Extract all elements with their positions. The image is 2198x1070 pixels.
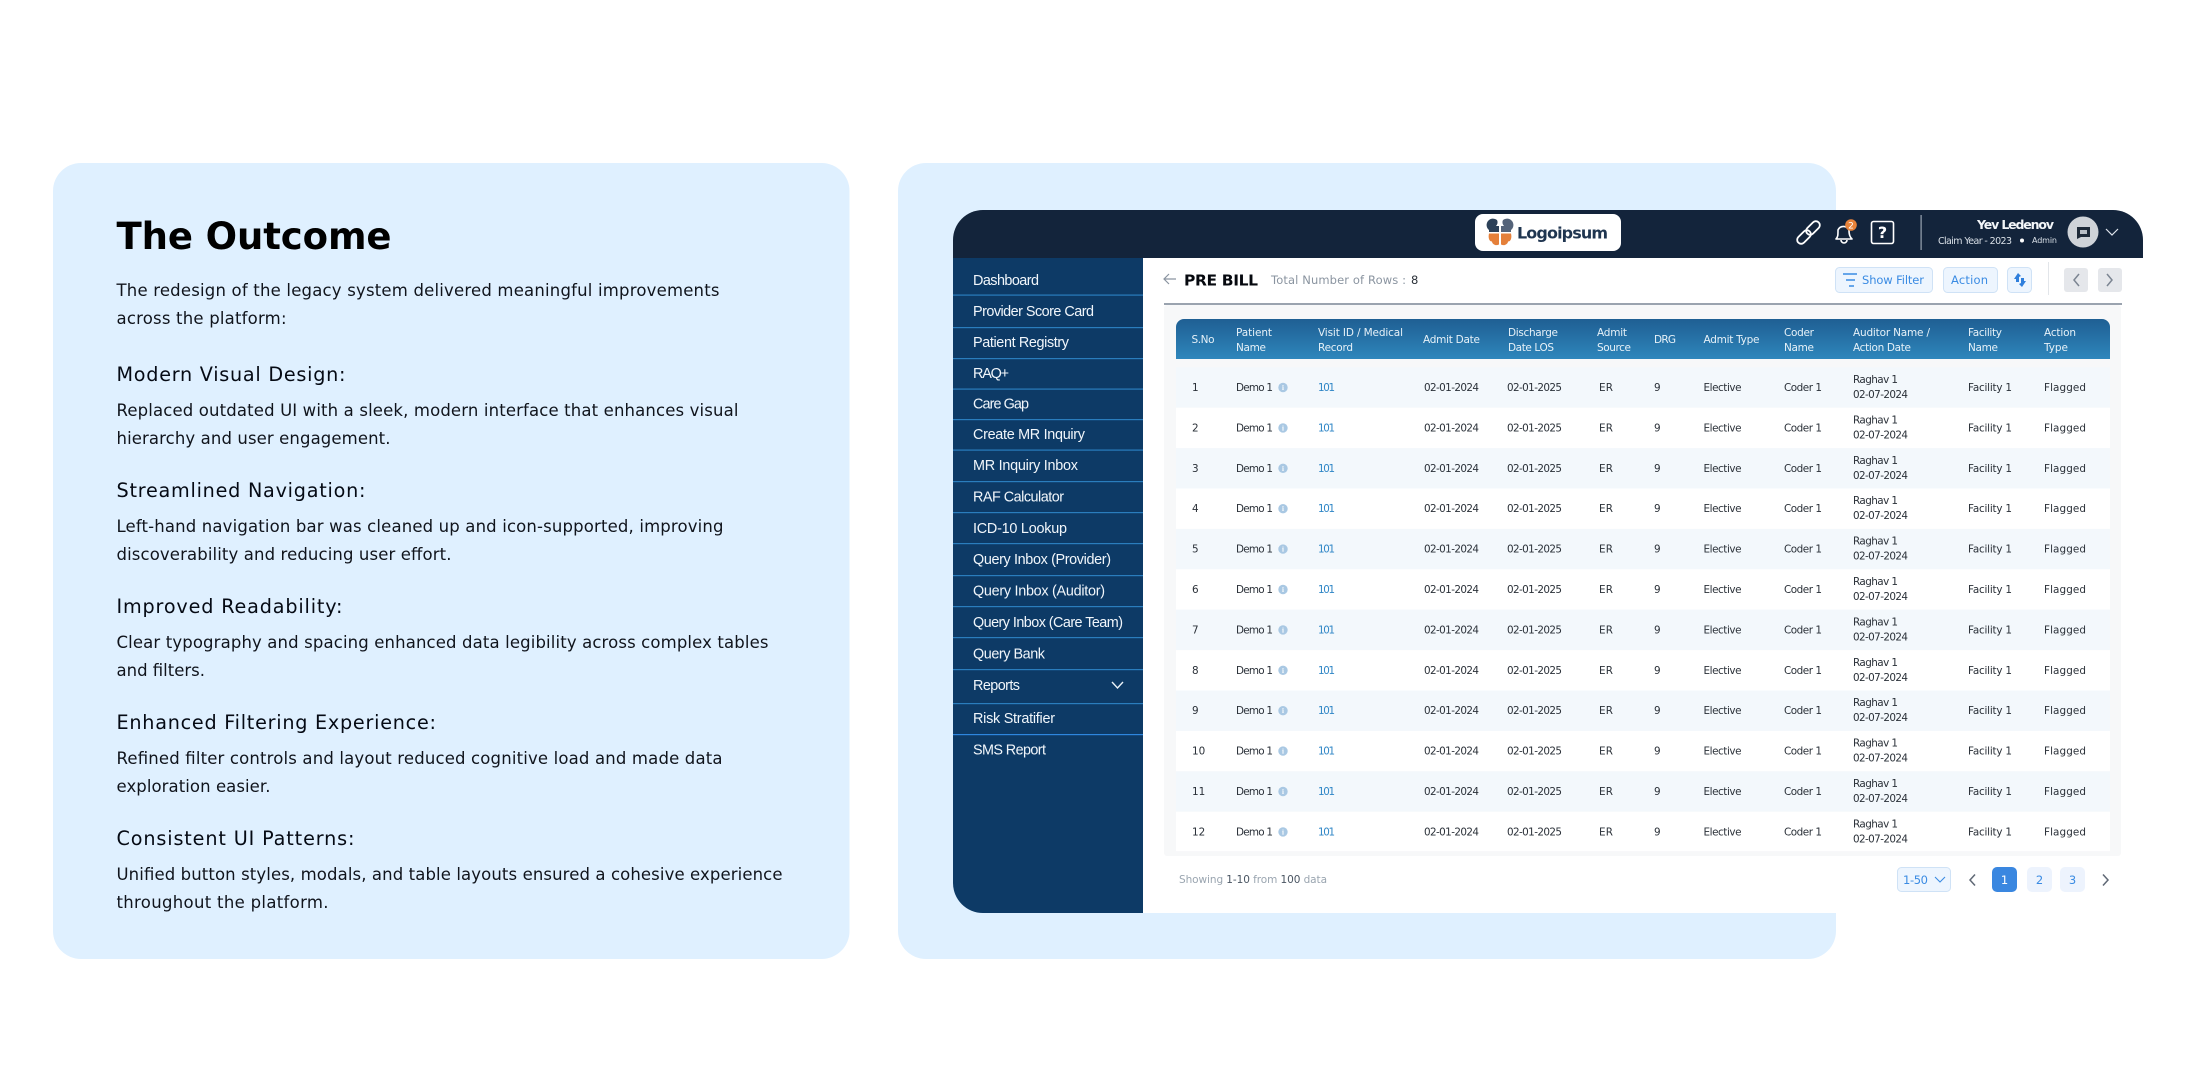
row 2: Elective (1704, 422, 1742, 434)
row 1: Coder 1 (1784, 382, 1822, 394)
title: The Outcome (116, 215, 392, 258)
icon: help (1872, 222, 1894, 244)
row 1: i (1282, 384, 1284, 392)
row 4: 9 (1654, 503, 1661, 515)
row 10: Demo 1 (1236, 746, 1273, 758)
row 7: Demo 1 (1236, 624, 1273, 636)
table header: Visit ID / Medical (1318, 327, 1403, 339)
row 5: Raghav 1 (1853, 536, 1898, 548)
row 12: Flagged (2044, 826, 2086, 838)
row 10: 9 (1654, 746, 1661, 758)
table header: Admit Date (1423, 334, 1480, 346)
row 3: 02-01-2024 (1424, 463, 1479, 475)
row 11: i (1282, 788, 1284, 796)
row 5: i (1282, 546, 1284, 554)
row 8: 02-01-2025 (1507, 665, 1562, 677)
row 9: i (1282, 707, 1284, 715)
row 8: 02-01-2024 (1424, 665, 1479, 677)
row 7: Facility 1 (1968, 624, 2012, 636)
row 3: Demo 1 (1236, 463, 1273, 475)
row 1: Flagged (2044, 382, 2086, 394)
row 4: Flagged (2044, 503, 2086, 515)
table header: Auditor Name / (1853, 327, 1930, 339)
row 9: Flagged (2044, 705, 2086, 717)
row 8: 02-07-2024 (1853, 672, 1908, 684)
row 11: 101 (1318, 786, 1335, 798)
row 11: 9 (1654, 786, 1661, 798)
action button (1944, 268, 1998, 292)
row 5: Coder 1 (1784, 544, 1822, 556)
row 2: i (1282, 424, 1284, 432)
row 1: 101 (1318, 382, 1335, 394)
sidebar navigation: Provider Score Card (973, 304, 1094, 320)
row 1: 02-01-2025 (1507, 382, 1562, 394)
row 4: Demo 1 (1236, 503, 1273, 515)
row 12: 101 (1318, 826, 1335, 838)
row 2: Flagged (2044, 422, 2086, 434)
row 1: Facility 1 (1968, 382, 2012, 394)
row 3 (1176, 448, 2110, 488)
row 4: Elective (1704, 503, 1742, 515)
row 7 (1176, 610, 2110, 650)
row 3: 02-07-2024 (1853, 470, 1908, 482)
sidebar navigation: Care Gap (973, 396, 1029, 412)
row 12: Demo 1 (1236, 826, 1273, 838)
row 6: Demo 1 (1236, 584, 1273, 596)
row 12: 9 (1654, 826, 1661, 838)
row 2: Coder 1 (1784, 422, 1822, 434)
row 4: 101 (1318, 503, 1335, 515)
row 1: ER (1599, 382, 1613, 394)
user info: Yev Ledenov (1976, 217, 2054, 232)
row 12: 12 (1192, 826, 1205, 838)
data table (1176, 319, 2110, 851)
table header: S.No (1192, 334, 1214, 346)
icon: back arrow (1164, 274, 1176, 284)
row 11: Coder 1 (1784, 786, 1822, 798)
row 8: ER (1599, 665, 1613, 677)
section: consistent ui patterns (116, 827, 782, 912)
row 4: 4 (1192, 503, 1199, 515)
row 2: 02-01-2024 (1424, 422, 1479, 434)
row 6: 02-01-2024 (1424, 584, 1479, 596)
row 12: ER (1599, 826, 1613, 838)
row 4 (1176, 488, 2110, 529)
row 9: Raghav 1 (1853, 697, 1898, 709)
prev next buttons (2064, 268, 2122, 292)
row 2: 9 (1654, 422, 1661, 434)
table header: Type (2043, 342, 2068, 354)
section: streamlined navigation: discoverability and reducing user effort. (116, 545, 452, 564)
pagination: 1 (2001, 873, 2008, 887)
row 5: 02-01-2025 (1507, 544, 1562, 556)
row 8: Coder 1 (1784, 665, 1822, 677)
row 12: Raghav 1 (1853, 818, 1898, 830)
page title bar: 8 (1411, 273, 1418, 287)
row 5: 101 (1318, 544, 1335, 556)
row 7: i (1282, 626, 1284, 634)
row 3: 02-01-2025 (1507, 463, 1562, 475)
table footer summary: Showing 1-10 from 100 data (1179, 874, 1327, 886)
row 9: Elective (1704, 705, 1742, 717)
sidebar navigation: ICD-10 Lookup (973, 521, 1067, 537)
section: consistent ui patterns: Consistent UI Patterns: (116, 827, 354, 850)
table container (1164, 305, 2121, 856)
row 8: 101 (1318, 665, 1335, 677)
row 10: 10 (1192, 746, 1205, 758)
row 3: 9 (1654, 463, 1661, 475)
row 11: 11 (1192, 786, 1205, 798)
section: streamlined navigation (116, 479, 724, 564)
pagination: 2 (2036, 873, 2043, 887)
section: consistent ui patterns: Unified button styles, modals, and table layouts ensured a cohesive experience (116, 865, 782, 884)
section: enhanced filtering: Enhanced Filtering Experience: (116, 711, 436, 734)
row 7: 02-01-2024 (1424, 624, 1479, 636)
row 10: 02-07-2024 (1853, 753, 1908, 765)
panel: screenshot backdrop (898, 163, 1836, 959)
row 10: ER (1599, 746, 1613, 758)
row 6: 6 (1192, 584, 1199, 596)
row 4: Coder 1 (1784, 503, 1822, 515)
row 11: 02-01-2025 (1507, 786, 1562, 798)
icon: bell with badge: 2 (1848, 222, 1854, 232)
section: modern visual design: hierarchy and user engagement. (116, 429, 390, 448)
row 2: 02-07-2024 (1853, 429, 1908, 441)
row 11: Demo 1 (1236, 786, 1273, 798)
row 3: 3 (1192, 463, 1199, 475)
sidebar navigation (953, 258, 1143, 913)
row 6: Elective (1704, 584, 1742, 596)
row 8: Demo 1 (1236, 665, 1273, 677)
row 7: ER (1599, 624, 1613, 636)
row 9: 9 (1192, 705, 1199, 717)
row 7: Elective (1704, 624, 1742, 636)
row 10 (1176, 731, 2110, 771)
row 9: 9 (1654, 705, 1661, 717)
row 2 (1176, 408, 2110, 448)
row 6: ER (1599, 584, 1613, 596)
row 5: Elective (1704, 544, 1742, 556)
row 2: ER (1599, 422, 1613, 434)
table header: Name (1236, 342, 1266, 354)
row 3: i (1282, 465, 1284, 473)
row 10: Elective (1704, 746, 1742, 758)
show filter button: Show Filter (1862, 273, 1924, 287)
sidebar navigation: Risk Stratifier (973, 711, 1055, 727)
row 6: Coder 1 (1784, 584, 1822, 596)
row 9: ER (1599, 705, 1613, 717)
row 11: Elective (1704, 786, 1742, 798)
row 6: i (1282, 586, 1284, 594)
row 3: Raghav 1 (1853, 455, 1898, 467)
row 5 (1176, 529, 2110, 569)
row 5: 02-07-2024 (1853, 551, 1908, 563)
table header: Patient (1236, 327, 1272, 339)
row 2: Demo 1 (1236, 422, 1273, 434)
row 1: 1 (1192, 382, 1199, 394)
section: modern visual design: Modern Visual Design: (116, 363, 346, 386)
row 4: 02-01-2024 (1424, 503, 1479, 515)
row 11: Raghav 1 (1853, 778, 1898, 790)
row 6 (1176, 569, 2110, 610)
sidebar navigation: RAQ+ (973, 366, 1009, 382)
intro text: across the platform: (116, 309, 286, 328)
row 11: Flagged (2044, 786, 2086, 798)
row 9: 02-01-2025 (1507, 705, 1562, 717)
sync button (2008, 268, 2032, 292)
table header: Facility (1968, 327, 2002, 339)
row 6: Facility 1 (1968, 584, 2012, 596)
row 8: 9 (1654, 665, 1661, 677)
row 7: 7 (1192, 624, 1199, 636)
row 1: Raghav 1 (1853, 374, 1898, 386)
page title bar: PRE BILL (1184, 272, 1258, 290)
row 2: Facility 1 (1968, 422, 2012, 434)
row 8: i (1282, 667, 1284, 675)
row 12: 02-01-2024 (1424, 826, 1479, 838)
sidebar navigation: Dashboard (973, 273, 1039, 289)
row 8: Raghav 1 (1853, 657, 1898, 669)
row 8: Elective (1704, 665, 1742, 677)
row 9: 02-01-2024 (1424, 705, 1479, 717)
row 5: 02-01-2024 (1424, 544, 1479, 556)
row 7: Raghav 1 (1853, 616, 1898, 628)
row 2: 101 (1318, 422, 1335, 434)
row 3: 101 (1318, 463, 1335, 475)
row 7: 02-01-2025 (1507, 624, 1562, 636)
table header: Coder (1784, 327, 1815, 339)
section: streamlined navigation: Left-hand navigation bar was cleaned up and icon-supported, improving (116, 517, 724, 536)
row 6: 02-01-2025 (1507, 584, 1562, 596)
sidebar navigation: MR Inquiry Inbox (973, 458, 1079, 474)
row 9 (1176, 690, 2110, 731)
icon: bell with badge (1836, 219, 1857, 243)
row 12: Facility 1 (1968, 826, 2012, 838)
section: improved readability: and filters. (116, 661, 205, 680)
row 1: 02-01-2024 (1424, 382, 1479, 394)
row 2: 2 (1192, 422, 1199, 434)
row 10: Flagged (2044, 746, 2086, 758)
row 2: 02-01-2025 (1507, 422, 1562, 434)
action button: Action (1951, 273, 1988, 287)
row 10: Facility 1 (1968, 746, 2012, 758)
table header: Name (1784, 342, 1814, 354)
page title bar (1164, 272, 1418, 290)
section: improved readability: Improved Readability: (116, 595, 342, 618)
pagination: 1-50 (1903, 873, 1928, 887)
row 12 (1176, 812, 2110, 851)
row 7: Flagged (2044, 624, 2086, 636)
table header: Source (1597, 342, 1631, 354)
row 9: 101 (1318, 705, 1335, 717)
row 4: Facility 1 (1968, 503, 2012, 515)
row 6: 101 (1318, 584, 1335, 596)
row 4: 02-07-2024 (1853, 510, 1908, 522)
section: consistent ui patterns: throughout the platform. (116, 893, 328, 912)
table header (1176, 319, 2110, 359)
section: streamlined navigation: Streamlined Navigation: (116, 479, 366, 502)
row 7: 9 (1654, 624, 1661, 636)
row 1: 02-07-2024 (1853, 389, 1908, 401)
app screenshot (953, 210, 2143, 913)
pagination (1898, 867, 2108, 892)
section: enhanced filtering: exploration easier. (116, 777, 270, 796)
row 11: 02-01-2024 (1424, 786, 1479, 798)
sidebar navigation: Query Inbox (Provider) (973, 552, 1111, 568)
sidebar navigation: Create MR Inquiry (973, 427, 1086, 443)
user info (1938, 217, 2057, 247)
row 2: Raghav 1 (1853, 414, 1898, 426)
section: enhanced filtering: Refined filter controls and layout reduced cognitive load and made data (116, 749, 722, 768)
row 3: ER (1599, 463, 1613, 475)
user info: Admin (2032, 236, 2057, 245)
row 5: 5 (1192, 544, 1199, 556)
panel: the outcome (53, 163, 850, 959)
row 8: 8 (1192, 665, 1199, 677)
section: improved readability: Clear typography and spacing enhanced data legibility across complex tables (116, 633, 768, 652)
row 5: 9 (1654, 544, 1661, 556)
row 8 (1176, 650, 2110, 690)
row 7: 02-07-2024 (1853, 631, 1908, 643)
row 9: Facility 1 (1968, 705, 2012, 717)
section: modern visual design (116, 363, 738, 448)
page title bar: Total Number of Rows : (1270, 273, 1406, 287)
icon: help: ? (1878, 223, 1887, 242)
row 11: Facility 1 (1968, 786, 2012, 798)
row 11: 02-07-2024 (1853, 793, 1908, 805)
row 10: 02-01-2025 (1507, 746, 1562, 758)
table header: Discharge (1508, 327, 1558, 339)
row 3: Flagged (2044, 463, 2086, 475)
row 1: Elective (1704, 382, 1742, 394)
row 5: ER (1599, 544, 1613, 556)
sidebar navigation: Query Inbox (Auditor) (973, 584, 1105, 600)
avatar (2068, 216, 2118, 248)
sidebar navigation: RAF Calculator (973, 490, 1064, 506)
row 4: ER (1599, 503, 1613, 515)
row 7: Coder 1 (1784, 624, 1822, 636)
row 8: Facility 1 (1968, 665, 2012, 677)
sidebar navigation: SMS Report (973, 742, 1046, 758)
row 12: Elective (1704, 826, 1742, 838)
row 10: Raghav 1 (1853, 738, 1898, 750)
row 12: 02-01-2025 (1507, 826, 1562, 838)
row 1: 9 (1654, 382, 1661, 394)
row 5: Demo 1 (1236, 544, 1273, 556)
row 9: 02-07-2024 (1853, 712, 1908, 724)
top header bar (953, 210, 2143, 258)
table header: Action (2044, 327, 2076, 339)
intro text (116, 281, 720, 328)
row 10: 02-01-2024 (1424, 746, 1479, 758)
row 11 (1176, 771, 2110, 812)
sidebar navigation: Reports (973, 678, 1020, 694)
toolbar buttons (1836, 262, 2122, 295)
icon: link (1796, 220, 1821, 245)
table header: DRG (1654, 334, 1676, 346)
show filter button (1836, 268, 1932, 292)
row 9: Demo 1 (1236, 705, 1273, 717)
row 4: Raghav 1 (1853, 495, 1898, 507)
row 1: Demo 1 (1236, 382, 1273, 394)
section: improved readability (116, 595, 768, 680)
pagination: 3 (2069, 873, 2076, 887)
row 3: Facility 1 (1968, 463, 2012, 475)
main white content area (1143, 258, 2143, 913)
table header: Admit Type (1704, 334, 1760, 346)
logo (1475, 214, 1621, 251)
row 11: ER (1599, 786, 1613, 798)
section: enhanced filtering (116, 711, 722, 796)
logo: Logoipsum (1517, 224, 1608, 242)
table header: Record (1318, 342, 1353, 354)
row 7: 101 (1318, 624, 1335, 636)
table header: Name (1968, 342, 1998, 354)
row 3: Coder 1 (1784, 463, 1822, 475)
row 6: Raghav 1 (1853, 576, 1898, 588)
row 6: 02-07-2024 (1853, 591, 1908, 603)
row 8: Flagged (2044, 665, 2086, 677)
row 12: i (1282, 828, 1284, 836)
table header: Date LOS (1508, 342, 1554, 354)
row 12: 02-07-2024 (1853, 833, 1908, 845)
sidebar navigation: Patient Registry (973, 335, 1070, 351)
row 9: Coder 1 (1784, 705, 1822, 717)
row 1 (1176, 367, 2110, 408)
sidebar navigation: Query Inbox (Care Team) (973, 615, 1123, 631)
row 10: i (1282, 748, 1284, 756)
row 4: i (1282, 505, 1284, 513)
row 6: 9 (1654, 584, 1661, 596)
intro text: The redesign of the legacy system delivered meaningful improvements (116, 281, 720, 300)
row 10: Coder 1 (1784, 746, 1822, 758)
row 12: Coder 1 (1784, 826, 1822, 838)
row 3: Elective (1704, 463, 1742, 475)
row 5: Facility 1 (1968, 544, 2012, 556)
row 10: 101 (1318, 746, 1335, 758)
row 6: Flagged (2044, 584, 2086, 596)
table header: Action Date (1853, 342, 1911, 354)
section: modern visual design: Replaced outdated UI with a sleek, modern interface that enhances visual (116, 401, 738, 420)
user info: Claim Year - 2023 (1938, 236, 2012, 247)
row 5: Flagged (2044, 544, 2086, 556)
row 4: 02-01-2025 (1507, 503, 1562, 515)
sidebar navigation: Query Bank (973, 646, 1046, 662)
table header: Admit (1597, 327, 1627, 339)
